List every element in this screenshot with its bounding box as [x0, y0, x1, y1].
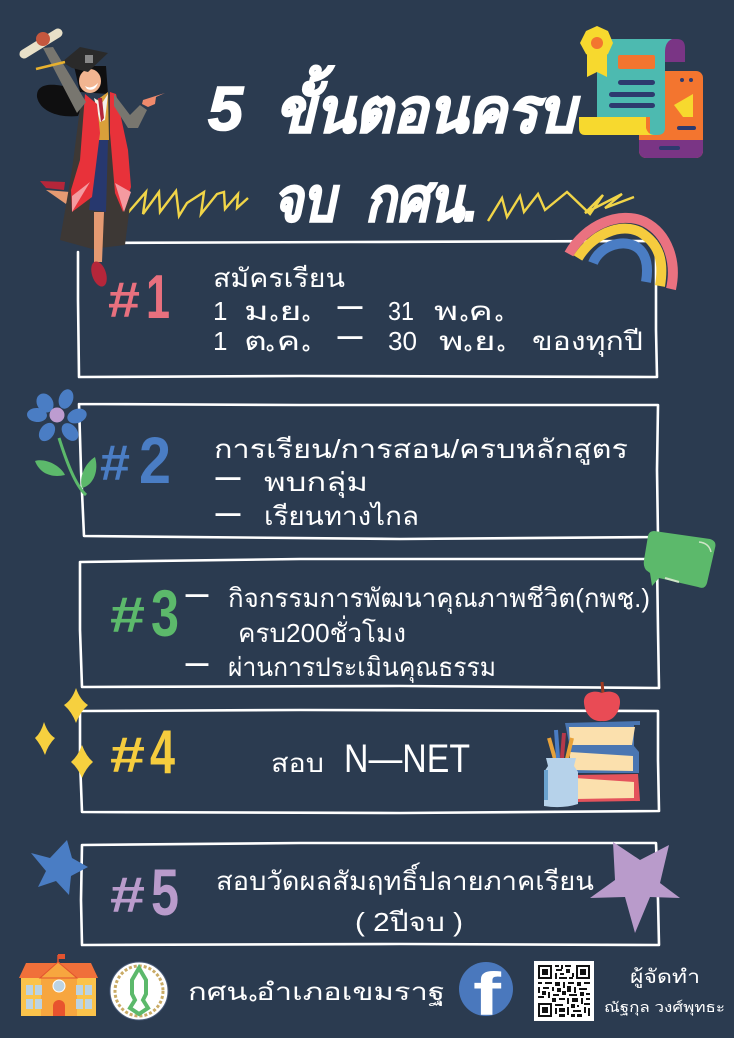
icon: books and apple [544, 682, 640, 807]
hair back [37, 85, 84, 116]
step 2 text: — [216, 461, 240, 491]
step 2 text: การเรียน/การสอน/ครบหลักสูตร [214, 434, 628, 465]
gown [60, 92, 130, 250]
icon: certificate and phone [579, 26, 703, 158]
step 1 text: สมัครเรียน [213, 263, 345, 293]
step 1 number [108, 263, 170, 332]
step 4 number: # [110, 727, 145, 783]
panel: step 1 [78, 241, 657, 377]
step 1 number: 1 [146, 263, 170, 332]
step 5 text: ( 2ปีจบ ) [355, 907, 463, 937]
step 3 text: — [186, 578, 208, 608]
pointing arm [114, 94, 147, 128]
panel: step 2 [79, 404, 658, 539]
icon: blue star [31, 840, 88, 895]
icon: school [19, 954, 98, 1016]
step 3 text: ผ่านการประเมินคุณธรรม [228, 652, 496, 683]
organisation name: กศน.อำเภอเขมราฐ [188, 979, 445, 1006]
cap [62, 47, 108, 72]
step 5 number [110, 855, 179, 929]
step 5 number: # [110, 867, 145, 923]
step 3 text: — [186, 647, 208, 677]
step 1 text: 1 [213, 326, 227, 356]
step 5 text [216, 862, 594, 937]
icon: rainbow [569, 218, 673, 289]
title: 5 [208, 75, 245, 144]
icon: graduate [24, 32, 165, 289]
step 1 text: พ.ย. [439, 326, 506, 356]
panel: step 3 [80, 559, 659, 688]
step 3 text: กิจกรรมการพัฒนาคุณภาพชีวิต(กพช.) [228, 583, 650, 614]
credit: ณัฐกุล วงศ์พุทธะ [604, 999, 725, 1016]
icon: speech bubble [644, 531, 715, 588]
step 1 text: พ.ค. [434, 296, 503, 326]
step 3 number: # [110, 587, 145, 643]
step 1 text: 30 [388, 326, 417, 356]
scribble right [488, 192, 634, 221]
step 4 number: 4 [150, 718, 175, 787]
step 1 text: ของทุกปี [532, 326, 643, 357]
back leg [46, 190, 70, 204]
leg and shoe [94, 212, 104, 262]
step 3 text [186, 578, 650, 683]
title: ขั้นตอนครบ [275, 65, 580, 146]
title: จบ [273, 166, 340, 235]
icon: facebook: f [473, 961, 502, 1028]
step 2 text: พบกลุ่ม [264, 467, 368, 498]
title: กศน. [365, 166, 478, 235]
step 3 number: 3 [151, 576, 179, 650]
step 2 text: — [216, 497, 240, 527]
step 2 number: # [100, 435, 130, 491]
step 1 text: 1 [213, 296, 227, 326]
raised arm [43, 47, 86, 113]
step 3 text: ครบ200ชั่วโมง [238, 615, 406, 648]
step 1 number: # [108, 272, 140, 328]
icon: facebook [459, 961, 513, 1028]
icon: sparkles [35, 688, 93, 778]
step 2 text: เรียนทางไกล [264, 501, 419, 531]
panel: step 4 [80, 710, 659, 813]
icon: emblem [110, 962, 168, 1020]
skirt [89, 140, 108, 212]
step 5 number: 5 [151, 855, 179, 929]
step 2 text [214, 434, 628, 531]
step 2 number [100, 423, 171, 497]
step 4 text [271, 737, 470, 781]
panel: step 5 [81, 843, 659, 945]
vest [97, 92, 109, 140]
step 1 text: 31 [388, 296, 414, 326]
icon: flower [26, 387, 96, 495]
footer [19, 954, 725, 1028]
step 1 text: ต.ค. [244, 326, 310, 356]
scroll [24, 33, 58, 54]
step 4 text: N—NET [344, 737, 470, 781]
step 4 text: สอบ [271, 748, 324, 778]
step 1 text: — [338, 290, 362, 320]
step 1 text: — [338, 320, 362, 350]
step 1 text [213, 263, 643, 357]
step 3 number [110, 576, 179, 650]
credit [604, 967, 725, 1016]
scribble left [126, 191, 248, 216]
step 4 number [110, 718, 175, 787]
step 5 text: สอบวัดผลสัมฤทธิ์ปลายภาคเรียน [216, 862, 594, 896]
credit: ผู้จัดทำ [630, 967, 700, 988]
step 1 text: ม.ย. [244, 296, 312, 326]
red sash [71, 94, 100, 212]
icon: purple star [590, 842, 680, 933]
QR code [534, 961, 594, 1021]
step 2 number: 2 [139, 423, 171, 497]
title [208, 65, 580, 235]
face [79, 69, 101, 93]
